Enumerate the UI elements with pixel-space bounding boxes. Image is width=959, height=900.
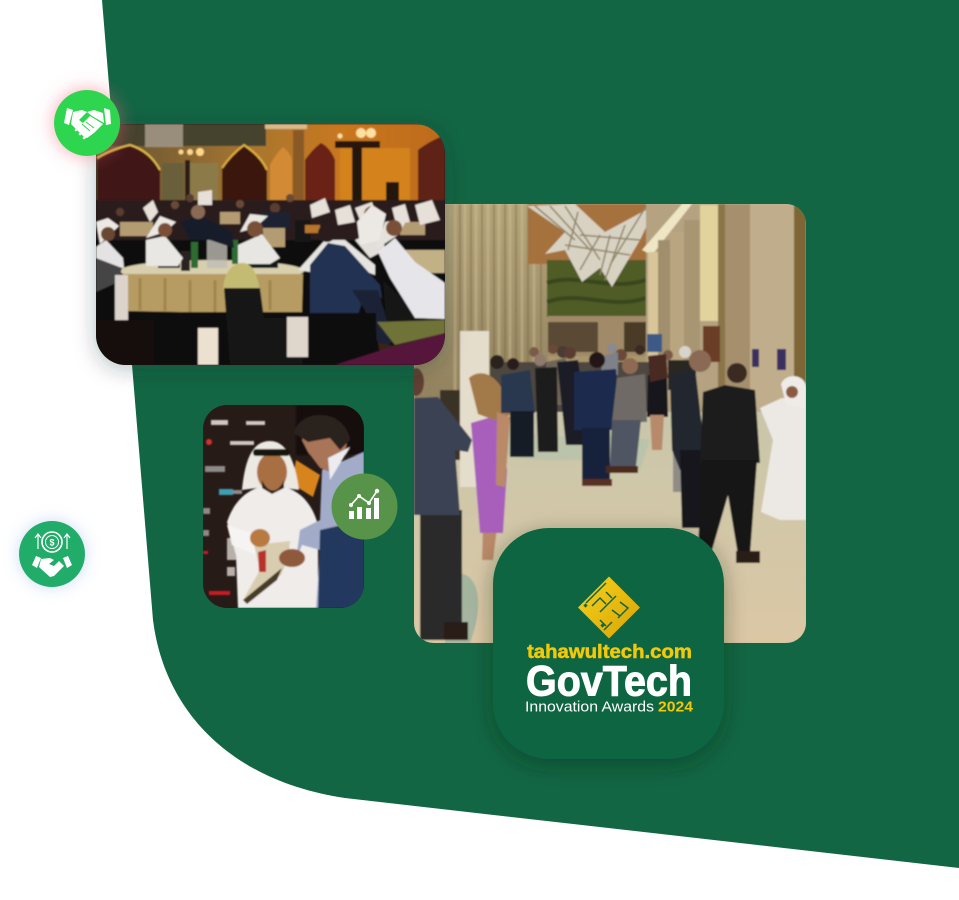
stage lights: [196, 148, 204, 156]
woman in purple dress: [469, 373, 510, 560]
logo wordmark: GovTech: [526, 658, 692, 706]
back crowd: [490, 343, 696, 412]
back rows of guests: [96, 190, 445, 247]
icon: money handshake badge: [19, 521, 85, 587]
man in dark suit far left: [408, 368, 472, 640]
logo card: [493, 528, 724, 759]
logo wordmark: 2024: [658, 700, 693, 716]
icon: handshake badge: [54, 90, 120, 156]
photo: networking hall: [408, 204, 806, 643]
icon: analytics chart badge: [332, 474, 398, 540]
arches: [97, 145, 160, 207]
chandelier sculpture: [527, 204, 657, 287]
logo: gold kufic diamond: [578, 576, 640, 638]
guests behind navy suit: [298, 240, 375, 275]
photo: award guest holding magazine: [203, 405, 364, 608]
guest in white thobe: [378, 238, 445, 319]
suited man in navy: [310, 243, 382, 315]
attendees: [408, 343, 806, 640]
group of guests: [501, 347, 806, 563]
front table: [120, 258, 305, 275]
black chair with gold cover: [223, 263, 260, 292]
icon: money handshake badge: $: [49, 538, 55, 548]
logo wordmark: Innovation Awards: [525, 700, 654, 716]
logo wordmark: tahawultech.com: [527, 642, 692, 663]
guests in white: [96, 240, 124, 268]
bottles and place settings: [191, 242, 198, 268]
photo: ballroom audience at round tables: [96, 124, 445, 365]
sponsor wall: [211, 420, 228, 425]
carpet: [377, 320, 445, 345]
logo wordmark: [525, 642, 693, 716]
